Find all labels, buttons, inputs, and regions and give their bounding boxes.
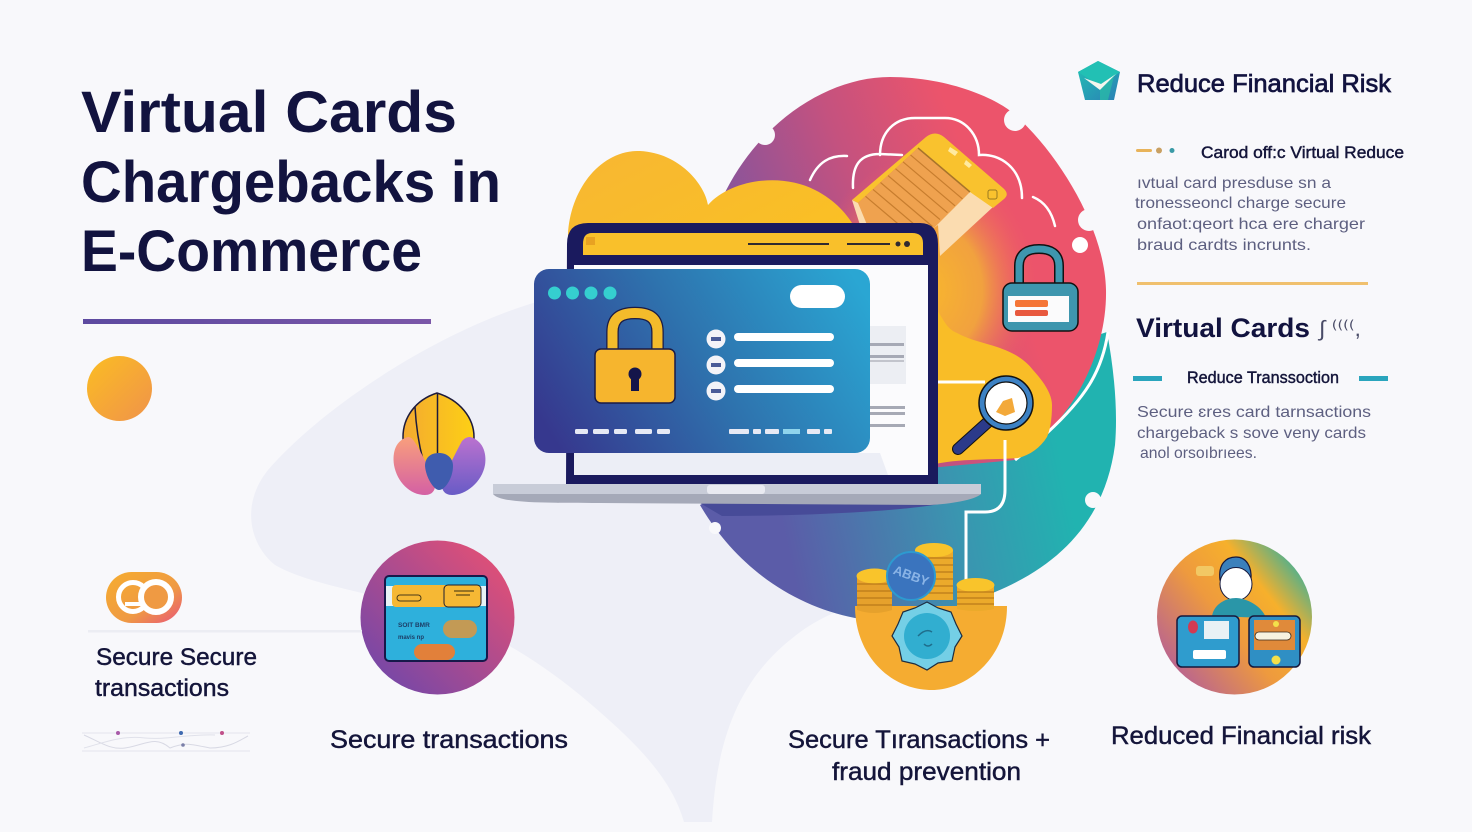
title: E-Commerce — [81, 219, 422, 284]
label: secure transactions fraud prevention: Secure Tıransactions + — [788, 726, 1050, 754]
label: secure transactions: Secure transactions — [330, 726, 568, 754]
orange glow — [810, 155, 1040, 425]
subheading: reduce transaction: Reduce Transsoction — [1187, 368, 1339, 387]
body text block one: ıvtual card presduse sn a — [1137, 175, 1331, 192]
label: secure secure transactions: Secure Secure — [96, 644, 257, 671]
label: secure secure transactions: transactions — [95, 675, 229, 702]
title underline — [83, 319, 431, 324]
body text block two — [1137, 404, 1371, 462]
icon: padlock — [595, 313, 675, 403]
dash and dots marker — [1136, 148, 1174, 154]
icon: shield with petals — [394, 393, 485, 495]
subheading: card offer: Carod off:c Virtual Reduce — [1201, 143, 1404, 162]
icon: coins and gear badge — [855, 543, 1007, 690]
icon: person with cards circle — [1157, 540, 1312, 694]
background lavender blob — [251, 303, 880, 822]
purple base shadow — [700, 503, 945, 516]
heading: virtual cards: Virtual Cards — [1136, 313, 1310, 343]
teal bar right — [1359, 376, 1388, 381]
cloud outline — [810, 118, 1055, 226]
heading: reduce financial risk: Reduce Financial Risk — [1137, 70, 1392, 98]
dashes — [575, 429, 832, 434]
teal bar left — [1133, 376, 1162, 381]
body text block one: tronesseoncl charge secure — [1135, 195, 1346, 212]
label: reduced financial risk: Reduced Financial risk — [1111, 722, 1372, 750]
icon: secure circle with card: SOIT BMR — [398, 622, 430, 629]
orange orb — [87, 356, 152, 421]
payment panel — [534, 269, 870, 453]
icon: secure circle with card: mavis np — [398, 635, 424, 641]
icon: magnifier — [958, 376, 1033, 449]
laptop screen frame — [566, 223, 938, 486]
body text block two: anol orsoıbrıees. — [1140, 445, 1257, 462]
icon: orange loop logo — [106, 572, 182, 623]
yellow wave — [930, 300, 1052, 465]
body text block one — [1135, 175, 1366, 254]
mini line chart — [82, 731, 250, 751]
scribble glyphs: ∫ ⁽⁽⁽⁽, — [1317, 316, 1361, 341]
list rows — [706, 330, 834, 400]
main blob: teal lower section — [700, 332, 1116, 619]
label: secure secure transactions — [95, 644, 257, 702]
yellow back hills — [568, 151, 855, 300]
laptop base — [493, 484, 981, 494]
title: Chargebacks in — [81, 150, 501, 215]
white divider curve — [1015, 332, 1108, 460]
orange divider — [1137, 282, 1368, 285]
label: secure transactions fraud prevention — [788, 726, 1050, 786]
screen content — [574, 265, 928, 475]
label: secure transactions fraud prevention: fraud prevention — [832, 758, 1021, 786]
icon: red lock — [1003, 249, 1078, 331]
white pill — [790, 285, 845, 308]
icon: tilted card — [852, 134, 1007, 256]
body text block two: Secure ɛres card tarnsactions — [1137, 404, 1371, 421]
body text block two: chargeback s sove veny cards — [1137, 425, 1366, 442]
left divider — [88, 630, 362, 632]
body text block one: braud cardts incrunts. — [1137, 237, 1311, 254]
connector lines — [938, 382, 1005, 592]
icon: secure circle with card — [360, 540, 514, 694]
laptop — [493, 223, 981, 516]
icon: gem check — [1078, 61, 1120, 100]
title — [81, 80, 501, 284]
main blob: gradient upper section — [700, 77, 1106, 480]
icon: coins and gear badge: ABBY — [891, 562, 931, 589]
browser bar — [583, 233, 923, 255]
window dots — [548, 286, 616, 300]
title: Virtual Cards — [81, 80, 457, 145]
notches on main blob — [709, 109, 1101, 534]
body text block one: onfaot:qeort hca ere charger — [1137, 216, 1366, 233]
